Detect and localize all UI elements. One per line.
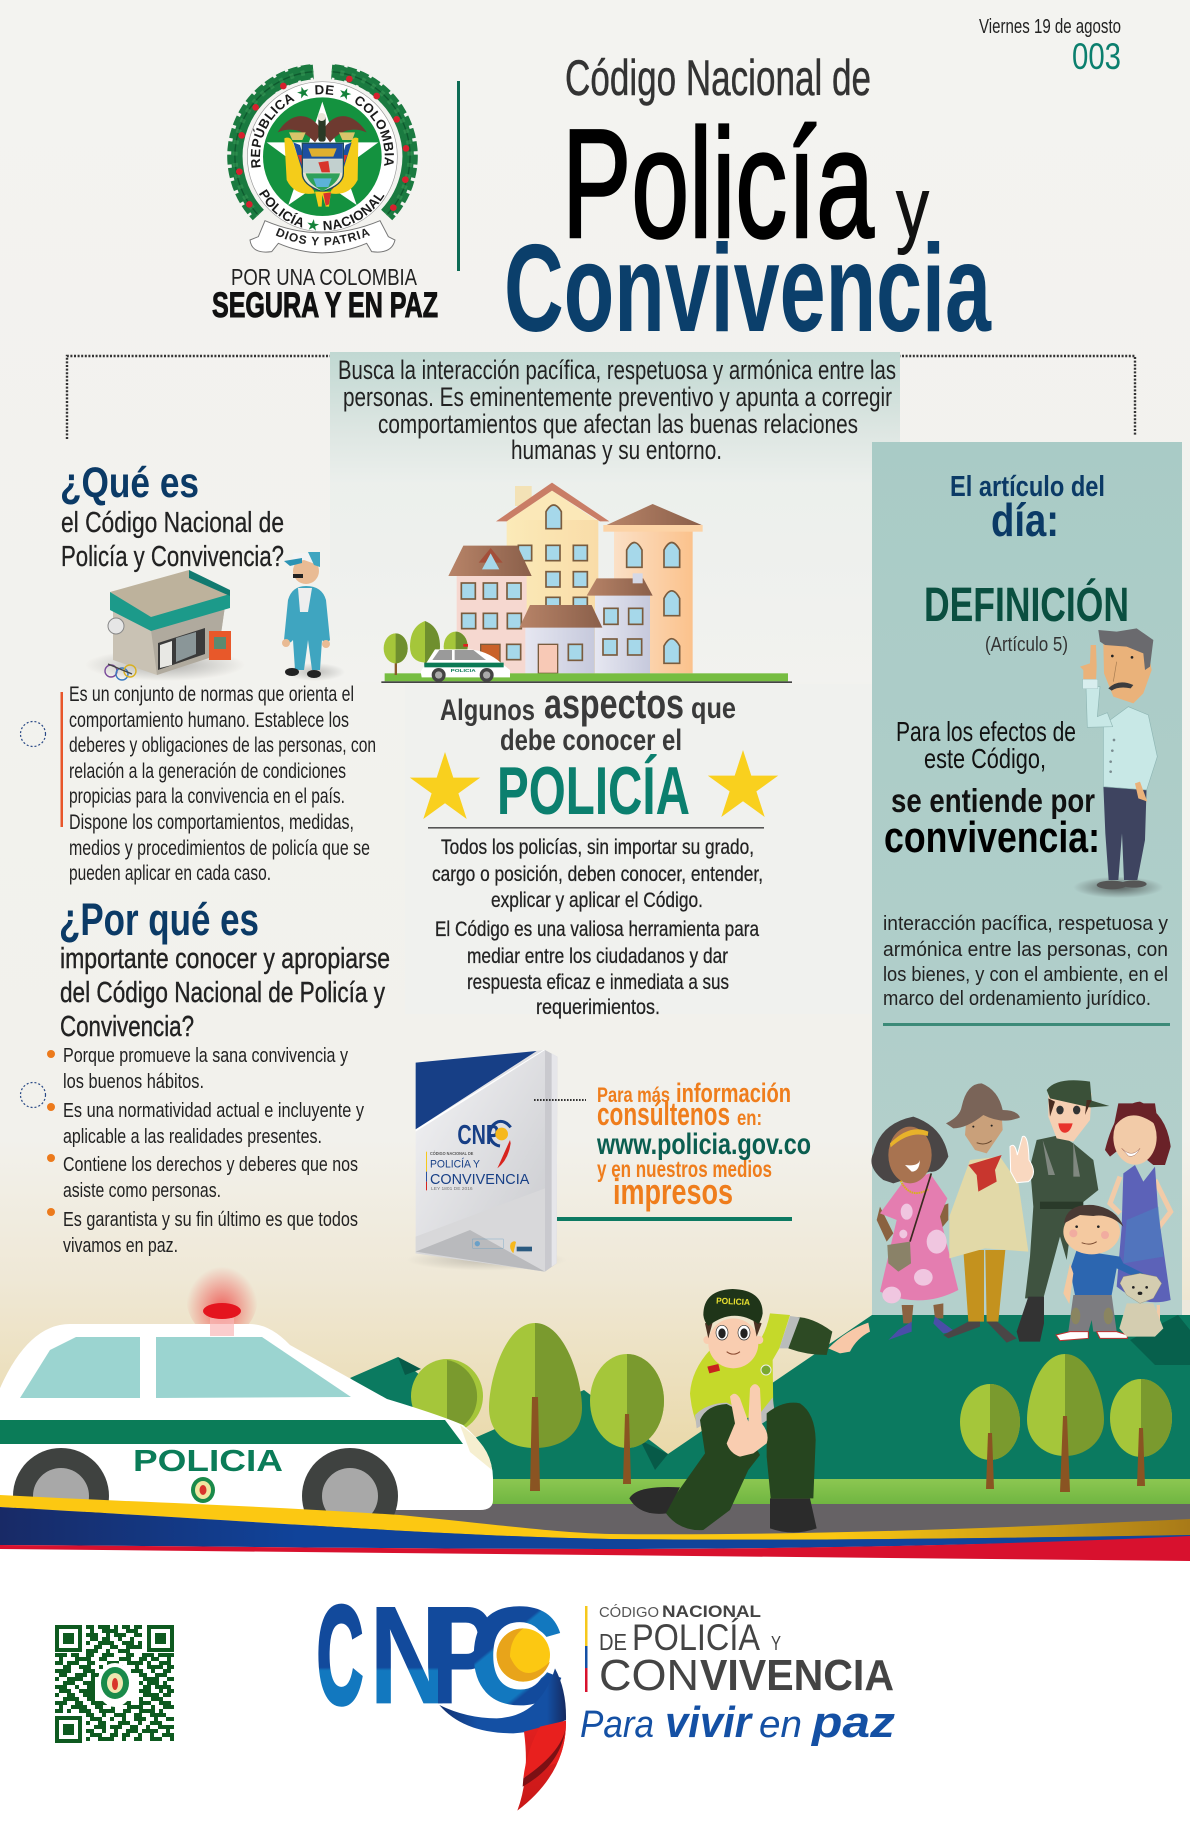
callout: more information: información [676, 1078, 791, 1108]
panel: artículo del día: Para los efectos de [896, 716, 1076, 747]
logo: wordmark: Y [771, 1633, 781, 1655]
trees [411, 1323, 1172, 1492]
heading: Qué es: Policía y Convivencia? [61, 541, 284, 573]
callout: more information: Para más [597, 1084, 670, 1107]
figure: woman in blue dress [1105, 1102, 1171, 1322]
figure: soldier [1010, 1080, 1109, 1342]
heading: Por qué es [59, 894, 390, 1043]
logo: wordmark: VIVENCIA [700, 1651, 894, 1700]
callout: more information: www.policia.gov.co [596, 1128, 811, 1161]
heading: Qué es: ¿Qué es [60, 459, 199, 507]
text: definición del código: relación a la generación de condiciones [69, 760, 346, 783]
logo: wordmark: CÓDIGO [599, 1604, 659, 1621]
illustration: book: CÓDIGO NACIONAL DE [430, 1151, 473, 1156]
heading: Qué es: el Código Nacional de [61, 507, 284, 539]
text: definición del código: propicias para la convivencia en el país. [69, 785, 345, 808]
logo: CNPC: N [369, 1576, 450, 1733]
panel: artículo del día: este Código, [924, 743, 1046, 774]
figure: boy [1056, 1205, 1143, 1341]
crest: Policía Nacional [227, 64, 418, 254]
slogan: SEGURA Y EN PAZ [212, 286, 438, 325]
divider [457, 81, 460, 271]
heading: POLICÍA: POLICÍA [497, 753, 690, 829]
panel: artículo del día: armónica entre las personas, con [883, 939, 1168, 961]
panel: intro [330, 352, 900, 1014]
callout: more information: y en nuestros medios [597, 1156, 772, 1182]
list: razones: vivamos en paz. [63, 1235, 178, 1257]
logo: CNPC [317, 1576, 566, 1811]
logo: wordmark: POLICÍA [632, 1617, 760, 1658]
text: definición del código [60, 683, 376, 885]
list: razones: Porque promueve la sana convivencia y [63, 1045, 348, 1067]
text: aspectos: explicar y aplicar el Código. [491, 889, 703, 912]
scene: grass [480, 1479, 1190, 1505]
dotted bracket [67, 356, 1135, 439]
logo: CNPC: C [468, 1577, 565, 1734]
list: razones: Es garantista y su fin último es que todos [63, 1209, 358, 1231]
callout: more information: en: [737, 1107, 762, 1130]
flag ribbon [0, 1495, 1190, 1561]
heading: Por qué es: Convivencia? [60, 1011, 194, 1043]
date: Viernes 19 de agosto [979, 16, 1121, 38]
text: aspectos: El Código es una valiosa herramienta para [435, 918, 759, 941]
text: aspectos: respuesta eficaz e inmediata a sus [467, 971, 729, 994]
illustration: book [407, 1050, 567, 1272]
callout: more information: impresos [613, 1171, 733, 1212]
icon: dotted circle 2 [20, 1082, 46, 1108]
callout: more information [596, 1078, 811, 1212]
panel: artículo del día: (Artículo 5) [985, 634, 1068, 656]
icon: star right [708, 750, 778, 817]
text: aspectos: Todos los policías, sin importar su grado, [441, 836, 754, 859]
panel: intro: Busca la interacción pacífica, respetuosa y armónica entre las [338, 355, 896, 385]
logo: wordmark: Para [580, 1704, 654, 1746]
illustration: book: CNP [457, 1119, 499, 1150]
text: aspectos [432, 836, 763, 1019]
figure: dog [1119, 1273, 1163, 1337]
panel: artículo del día: El artículo del [950, 471, 1105, 503]
crest: Policía Nacional: POLICÍA ★ NACIONAL [259, 189, 384, 231]
slogan: POR UNA COLOMBIA [231, 264, 418, 290]
panel: artículo del día: marco del ordenamiento jurídico. [883, 988, 1151, 1010]
figure: woman in pink dress [871, 1117, 958, 1340]
callout: more information: consúltenos [597, 1096, 730, 1132]
scene: road [380, 1504, 1190, 1540]
panel: artículo del día: convivencia: [884, 813, 1100, 862]
icon: star left [410, 752, 480, 819]
heading: aspectos: Algunos [440, 694, 535, 727]
text: definición del código: Es un conjunto de normas que orienta el [69, 683, 354, 706]
crest: Policía Nacional: DIOS Y PATRIA [276, 228, 370, 246]
illustration: police officer: POLICIA [716, 1295, 751, 1307]
list: razones [47, 1045, 364, 1257]
panel: intro: personas. Es eminentemente preventivo y apunta a corregir [343, 382, 892, 412]
list: razones: aplicable a las realidades presentes. [63, 1126, 322, 1148]
heading: Por qué es: ¿Por qué es [59, 894, 259, 945]
illustration: family group [871, 1080, 1171, 1343]
logo: wordmark: vivir [665, 1698, 754, 1747]
text: definición del código: deberes y obligaciones de las personas, con [69, 734, 376, 757]
illustration: book: LEY 1801 DE 2016 [431, 1186, 473, 1192]
text: aspectos: mediar entre los ciudadanos y dar [467, 945, 728, 968]
title [504, 50, 992, 358]
text: definición del código: Dispone los comportamientos, medidas, [69, 811, 354, 834]
heading: Por qué es: del Código Nacional de Policía y [60, 977, 385, 1009]
logo: wordmark: paz [811, 1698, 895, 1747]
title: Código Nacional de [565, 50, 871, 106]
illustration: police car [0, 1254, 493, 1544]
dotted connector [534, 1099, 586, 1101]
icon: worker [282, 552, 345, 681]
text: definición del código: medios y procedimientos de policía que se [69, 837, 370, 860]
text: definición del código: pueden aplicar en cada caso. [69, 862, 271, 885]
scene: hills [350, 1300, 1190, 1479]
list: razones: asiste como personas. [63, 1180, 221, 1202]
logo: wordmark: CON [599, 1651, 699, 1700]
list: razones: Es una normatividad actual e incluyente y [63, 1100, 364, 1122]
title: y [896, 161, 929, 256]
panel: artículo del día [872, 442, 1182, 1315]
heading: aspectos: que [691, 692, 736, 725]
text: definición del código: comportamiento humano. Establece los [69, 709, 349, 732]
edition number: 003 [1072, 36, 1121, 77]
panel: artículo del día: interacción pacífica, respetuosa y [883, 913, 1168, 935]
logo: wordmark: DE [599, 1629, 627, 1655]
illustration: man pointing [1073, 628, 1163, 898]
icon: dotted circle [20, 722, 46, 746]
figure: man with hat [943, 1083, 1028, 1343]
panel: artículo del día: día: [991, 494, 1059, 546]
heading: aspectos: aspectos [544, 680, 684, 727]
QR code [55, 1625, 174, 1743]
crest: Policía Nacional: REPÚBLICA ★ DE ★ COLOMBIA [250, 85, 394, 168]
list: razones: los buenos hábitos. [63, 1071, 204, 1093]
illustration: book: CONVIVENCIA [430, 1172, 530, 1188]
logo: CNPC: P [432, 1576, 495, 1733]
text: aspectos: cargo o posición, deben conocer, entender, [432, 863, 763, 886]
heading: Por qué es: importante conocer y apropiarse [60, 943, 390, 975]
heading: aspectos: debe conocer el [500, 724, 682, 757]
logo: wordmark [580, 1602, 895, 1747]
heading: Qué es [60, 459, 284, 573]
illustration: police officer [629, 1289, 870, 1532]
icon: police station [85, 570, 245, 681]
illustration: police car: POLICIA [133, 1443, 283, 1478]
illustration: houses: POLICIA [451, 668, 476, 674]
logo: wordmark: NACIONAL [662, 1602, 761, 1621]
text: aspectos: requerimientos. [536, 996, 660, 1019]
illustration: houses [381, 483, 792, 683]
panel: artículo del día: se entiende por [891, 782, 1095, 819]
illustration: book: POLICÍA Y [430, 1157, 480, 1170]
title: Policía [562, 97, 875, 270]
logo: wordmark: en [759, 1704, 802, 1746]
panel: intro: humanas y su entorno. [511, 435, 722, 465]
heading: aspectos [440, 680, 736, 757]
list: razones: Contiene los derechos y deberes que nos [63, 1154, 358, 1176]
slogan [212, 264, 438, 325]
logo: CNPC: C [317, 1576, 363, 1733]
panel: intro: comportamientos que afectan las buenas relaciones [378, 409, 858, 439]
panel: artículo del día: los bienes, y con el ambiente, en el [883, 964, 1168, 986]
